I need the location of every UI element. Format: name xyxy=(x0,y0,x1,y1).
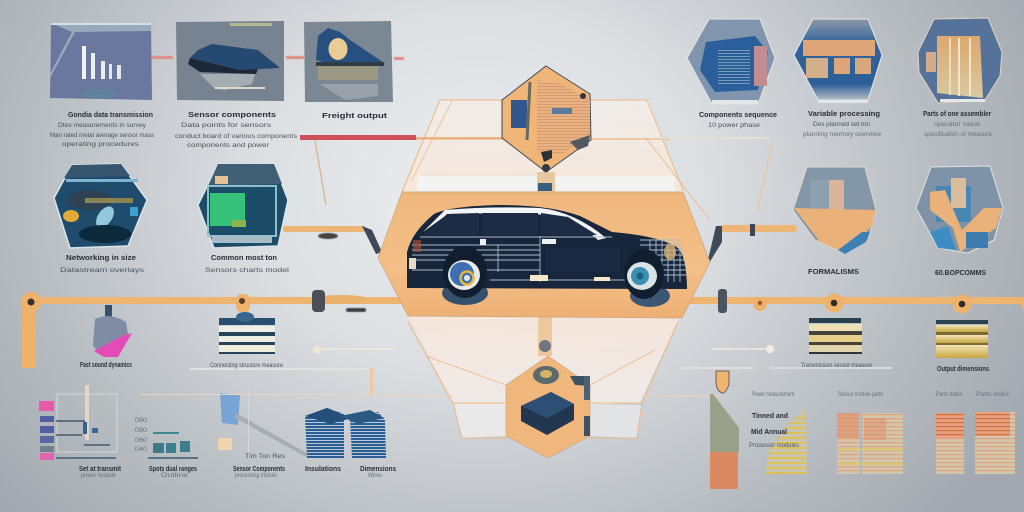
text block: bottom left captions: Tim Ton Res xyxy=(245,453,286,460)
text block: left hexagon captions: Datastream overlays xyxy=(60,267,145,274)
chart: bottom left small bars: 040 xyxy=(135,446,147,453)
chart: bottom left small bars: 060 xyxy=(135,437,147,444)
text block: top right captions: Components sequence xyxy=(699,112,777,119)
chart: dotted orange grid right 1 xyxy=(936,413,964,474)
chart: bottom left small bars: 080 xyxy=(135,427,147,434)
photo: dome device xyxy=(304,21,393,102)
text block: bottom right labels: Power measurement xyxy=(752,391,794,398)
hexagon: bottom centre chip stack xyxy=(506,356,590,458)
text block: top photo 2 caption xyxy=(175,112,298,149)
text block: bottom left captions: Dimensions xyxy=(360,466,396,473)
text block: top photo 3 caption: Freight output xyxy=(322,113,388,120)
text block: top right captions: Des planned set ton xyxy=(813,121,870,128)
text block: bottom left captions: power module xyxy=(81,472,116,479)
text block: top photo 2 caption: Data points for sensors xyxy=(181,122,272,129)
hexagon: top centre circuit xyxy=(502,66,591,172)
icon: gold stack far right xyxy=(936,320,988,358)
text block: top right captions xyxy=(699,111,992,138)
connector: red links between top-left photos xyxy=(147,56,404,60)
green chart xyxy=(210,193,245,226)
chart: bottom left legend and bars xyxy=(39,385,117,460)
text block: bottom left captions: Insulations xyxy=(305,466,341,473)
connector: bottom left guide lines xyxy=(140,367,892,396)
text block: rail captions: Output dimensions xyxy=(937,366,989,373)
text block: top photo 1 caption: Dtes measurements in survey xyxy=(58,122,147,129)
text block: bottom left captions xyxy=(79,453,396,479)
text block: top photo 2 caption: Sensor components xyxy=(188,112,276,119)
timeline: horizontal orange rail xyxy=(21,289,1024,368)
text block: top right captions: Variable processing xyxy=(808,111,880,118)
text block: bottom left captions: Sensor Components xyxy=(233,466,285,473)
hexagon: photo top right 2 xyxy=(794,19,882,103)
icon: pink device xyxy=(93,305,132,357)
hexagon: photo left 2 with green chart xyxy=(198,164,288,248)
text block: top photo 1 caption xyxy=(50,112,155,148)
text block: bottom right labels: Tinned and xyxy=(752,413,788,420)
icon: rear wheel xyxy=(624,249,664,299)
text block: top photo 1 caption: Gondia data transmission xyxy=(68,112,153,119)
text block: bottom left captions: Outline xyxy=(161,472,188,479)
text block: top right captions: specification of measure xyxy=(924,131,992,138)
text block: rail captions xyxy=(80,362,989,373)
text block: top right captions: Parts of one assembler xyxy=(923,111,991,118)
connector: right mid bar to centre xyxy=(706,224,797,268)
panel: pale upper hexagon frame xyxy=(402,100,772,220)
text block: bottom left captions: processing module xyxy=(235,472,277,479)
text block: bottom left captions: Wires xyxy=(368,472,383,479)
text block: bottom right labels: Processor modules xyxy=(749,442,800,449)
text block: top photo 2 caption: conduct board of various components xyxy=(175,133,298,140)
text block: rail captions: Transmission sensor measure xyxy=(801,362,872,369)
text block: bottom right labels: Parts index xyxy=(936,391,963,398)
hexagon: photo left 1 xyxy=(54,164,147,248)
text block: top photo 1 caption: Man rated metal average sensor mass xyxy=(50,132,155,139)
hexagon: photo mid right 1 xyxy=(793,167,876,254)
icon: front wheel xyxy=(443,246,487,298)
chart: slanted line with blue fan xyxy=(218,390,310,458)
text block: bottom right labels: Sensor module parts xyxy=(838,391,884,398)
orange central hexagon xyxy=(378,192,710,318)
text block: top right captions: 10 power phase xyxy=(708,122,760,129)
central hexagon with car xyxy=(378,192,710,318)
text block: rail captions: Connecting structure measure xyxy=(210,362,283,369)
text block: left hexagon captions: Networking in size xyxy=(66,255,136,262)
hexagon: photo top right 1 xyxy=(687,19,775,104)
hexagon: photo top right 3 xyxy=(918,18,1002,103)
text block: top photo 1 caption: operating procedures xyxy=(62,141,140,148)
text block: top right captions: operator value xyxy=(934,121,980,128)
text block: left hexagon captions xyxy=(60,255,290,274)
icon: stripes stack left xyxy=(219,312,275,354)
text block: top right captions: planning memory overview xyxy=(803,131,881,138)
chart: dotted yellow bars xyxy=(765,410,807,474)
text block: top photo 2 caption: components and power xyxy=(187,142,270,149)
bar chart xyxy=(82,46,121,79)
icon: gold stack centre right xyxy=(809,318,862,354)
text block: left hexagon captions: Common most ton xyxy=(211,255,277,262)
hexagon: photo mid right 2 xyxy=(916,166,1003,253)
text block: bottom right labels: Parts index xyxy=(976,391,1010,398)
icon: car xyxy=(407,205,687,307)
chart: dotted orange grid centre xyxy=(837,413,903,474)
text block: mid right captions: 60.BOPCOMMS xyxy=(935,270,986,277)
text block: bottom left captions: Set at transmit xyxy=(79,466,122,473)
text block: left hexagon captions: Sensors charts model xyxy=(205,267,290,274)
icon: blue chip stacks xyxy=(305,408,386,458)
photo: solar board xyxy=(176,21,284,101)
panel: pale lower hexagon frame xyxy=(380,172,720,438)
icon: orange pin and striped column xyxy=(710,371,739,489)
chart: dotted orange grid right 2 xyxy=(975,412,1015,474)
text block: bottom right labels: Mid Annual xyxy=(751,429,787,436)
text block: mid right captions: FORMALISMS xyxy=(808,269,859,276)
photo: bar chart panel xyxy=(50,23,152,100)
connector: red bar to top hexagon xyxy=(300,135,505,205)
text block: bottom right labels xyxy=(749,391,1010,449)
chart: bottom left small bars xyxy=(135,394,248,459)
text block: mid right captions xyxy=(808,269,986,277)
text block: rail captions: Fast sound dynamics xyxy=(80,362,132,369)
text block: bottom left captions: Spots dual ranges xyxy=(149,466,197,473)
connector: left mid bar to centre xyxy=(283,226,382,254)
chart: bottom left small bars: 080 xyxy=(135,417,147,424)
